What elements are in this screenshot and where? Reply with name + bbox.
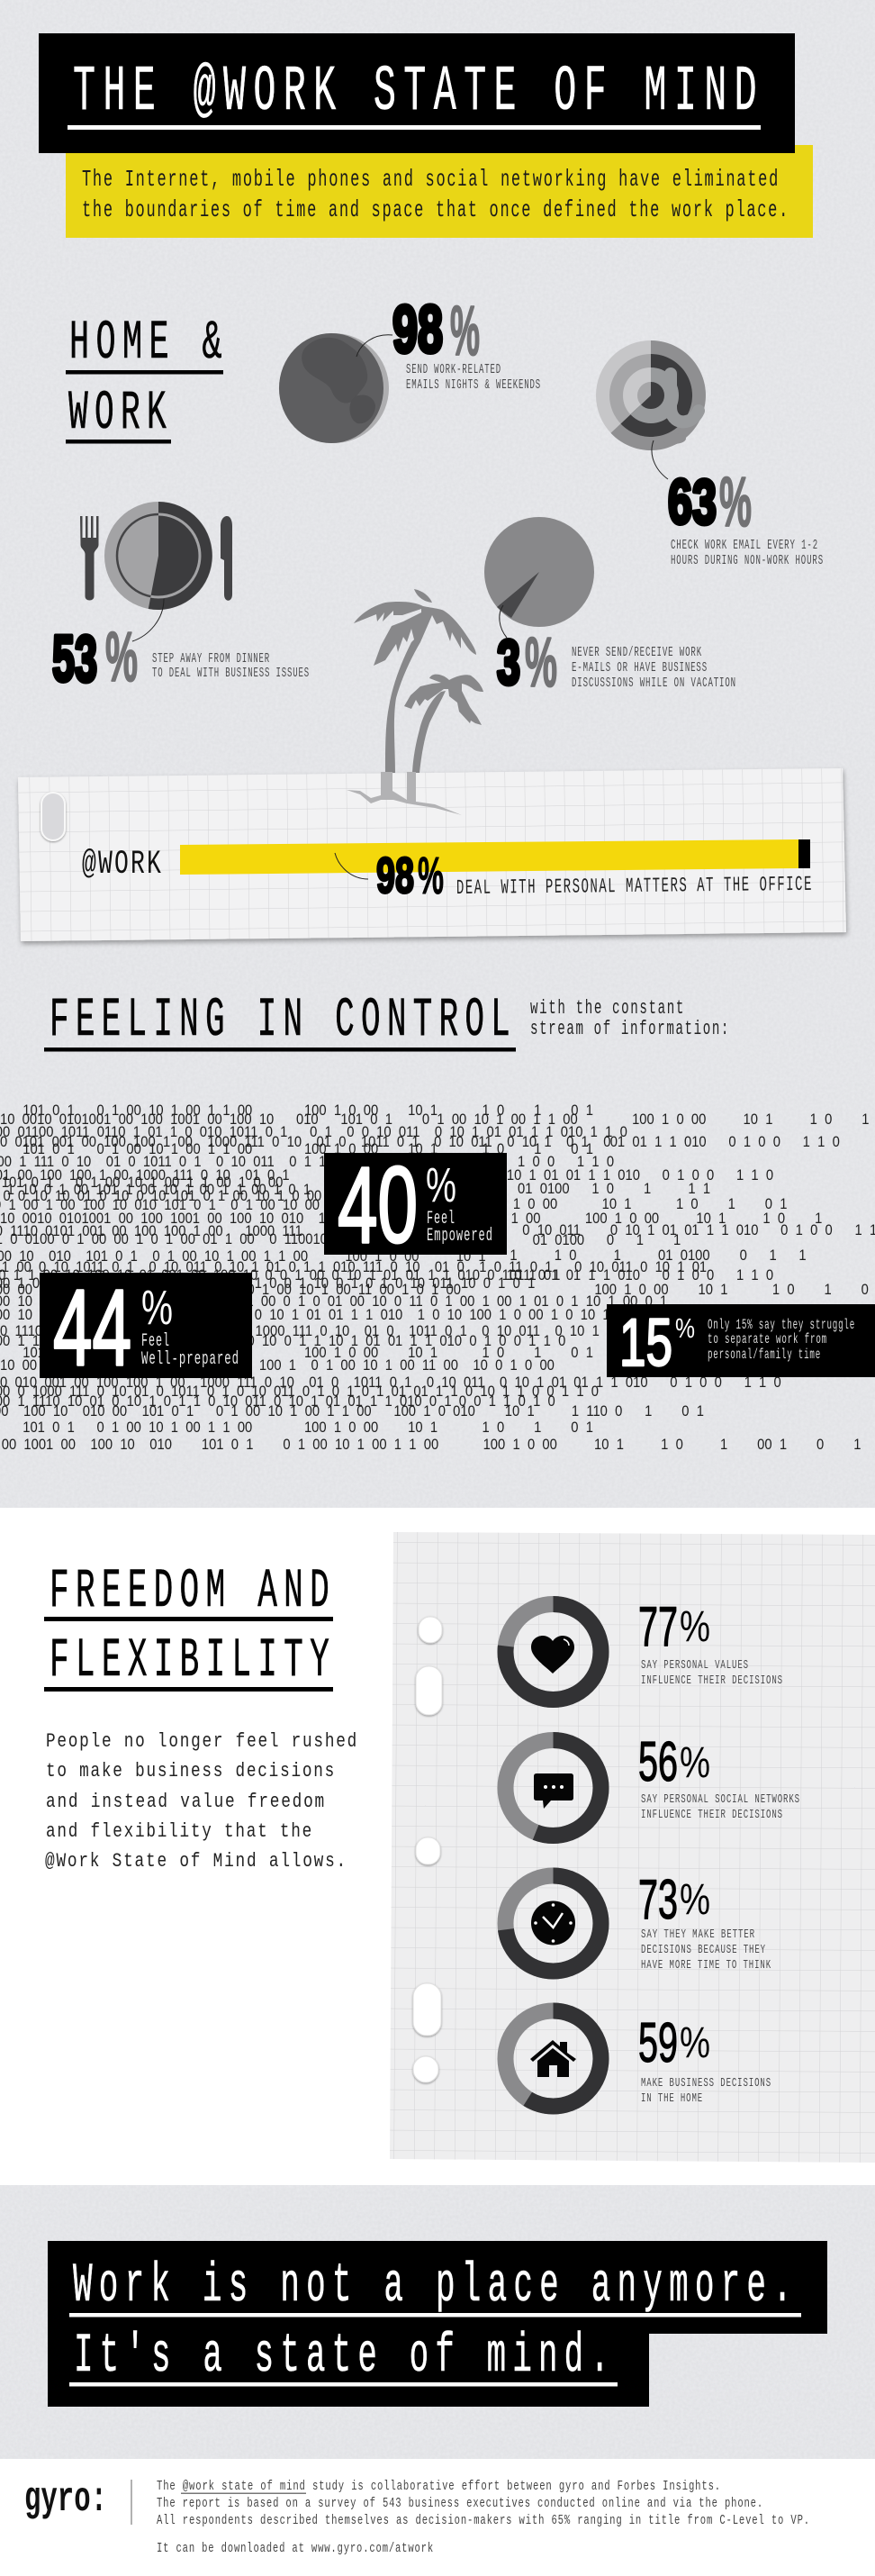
- callout: 15 percent struggle: [607, 1304, 875, 1380]
- leader line: [132, 599, 164, 641]
- intro yellow panel: [66, 145, 813, 238]
- icon: plate: [104, 502, 212, 610]
- footer text: [157, 2479, 810, 2556]
- stat row: 77 percent: [506, 1596, 783, 1700]
- caption: STEP AWAY FROM DINNER: [152, 652, 270, 667]
- value: 98: [392, 292, 443, 367]
- value: %: [680, 1603, 710, 1651]
- value: 73: [638, 1869, 678, 1931]
- binary stream pattern: 00 00 1 0 1 00 10 00 100 0 1 00 1 0 1 00 10 1 00 11 00 1 0 1 00: [0, 1282, 461, 1298]
- callout: 15 percent struggle: %: [675, 1312, 695, 1344]
- background: white middle band: [0, 1508, 875, 2185]
- text block: freedom paragraph: [45, 1730, 358, 1873]
- background: closing textured band: [0, 2185, 875, 2459]
- binary stream pattern: 00 10 010 101 0 1 0 1 00 10 1 00 1 1 00 100 1 0 00 10 1: [0, 1248, 486, 1265]
- punched hole: [41, 793, 65, 840]
- stat row: 73 percent: [506, 1869, 771, 1973]
- binary stream pattern: 1 0 0 1 1 0: [518, 1154, 614, 1170]
- stat: vacation 3 percent: [484, 517, 736, 702]
- title underline: [68, 125, 761, 130]
- leader line: [356, 335, 392, 357]
- heading: freedom and flexibility: FREEDOM AND: [50, 1561, 336, 1623]
- icon: at pie: [596, 340, 706, 450]
- binary stream pattern: 9 1 10 0 1 00 101 1 00 10 1 00 1 1 00 1 0 1: [0, 1182, 311, 1198]
- caption: [671, 539, 824, 568]
- callout: 15 percent struggle: 15: [619, 1305, 672, 1380]
- panel: grid paper: [390, 1532, 875, 2163]
- caption: NEVER SEND/RECEIVE WORK: [572, 646, 702, 660]
- callout: 44 percent feel well-prepared: Well-prepared: [141, 1349, 239, 1370]
- binary stream pattern: 01 01 1 1 010 0 1 0 0 1 1 0: [610, 1134, 840, 1150]
- binary stream pattern: 10 1 01 01 1 1 010 0 1 0 0 1 1 0: [507, 1267, 773, 1283]
- callout: 40 percent feel empowered: %: [426, 1158, 456, 1212]
- stat: moon 98 percent: %: [450, 291, 480, 370]
- binary stream pattern: 0 1110 1 01 0 1000 111 0 10 01 0 1000 111 0 10 01 0 1011 0 1 0 10 011 0 10 1 01: [0, 1323, 622, 1339]
- caption: E-MAILS OR HAVE BUSINESS: [572, 661, 708, 676]
- caption: [641, 1927, 771, 1973]
- caption: HAVE MORE TIME TO THINK: [641, 1958, 771, 1973]
- value: %: [680, 1739, 710, 1787]
- value: %: [418, 847, 444, 905]
- subheading text: stream of information:: [530, 1018, 730, 1040]
- donut: 77 percent with heart: [506, 1604, 601, 1700]
- value: %: [719, 462, 752, 541]
- caption: IN THE HOME: [641, 2091, 703, 2106]
- binary stream pattern: 0 0101 001 00 100 100 1 00 1000 111 0 10 01 0 1011 0 1 0 10 011 0 10 1 0 1 0: [0, 1134, 611, 1150]
- binary stream pattern: 10 0010 0101001 00 100 1001 00 100 10 010 101 0 1 0 1 00 10 1 00 1 1 00: [0, 1111, 578, 1128]
- binary stream pattern: 0 10 011 0 10 1 01 01 1 1 010 0 1 0 0 1 1: [522, 1222, 875, 1238]
- heading: freedom and flexibility: [44, 1561, 336, 1692]
- caption: SAY PERSONAL VALUES: [641, 1658, 749, 1673]
- donut: 56 percent with speech bubble: [506, 1740, 601, 1836]
- binary stream pattern: 0 1110 0101 001 00 100 100 1 00 1000 111: [0, 1223, 302, 1239]
- stat: dinner plate 53 percent: [52, 502, 310, 696]
- callout: 44 percent feel well-prepared: Feel: [141, 1331, 170, 1352]
- icon: fork: [80, 516, 99, 600]
- caption: SAY THEY MAKE BETTER: [641, 1927, 755, 1942]
- logo: gyro: gyro:: [24, 2476, 107, 2523]
- leader line: [335, 853, 368, 879]
- palm roots: [347, 772, 462, 815]
- subheading text: with the constant: [530, 997, 685, 1020]
- leader line: [652, 440, 668, 479]
- callout: 44 percent feel well-prepared: 44: [53, 1267, 131, 1388]
- closing statement block: [48, 2241, 827, 2407]
- binary stream pattern: 101 0 1 0 1 00 10 1 00 1 1 00 1 0 00: [2, 1175, 284, 1191]
- text block: freedom paragraph: People no longer feel rushed: [46, 1730, 358, 1753]
- binary stream pattern: 00 10 01 0 1000 11 0 1 10 1 00 1 01 00 0 1 0 01 00 10 0 11 0 1 00 1 00 1 01 0 1 10 1 00 0 1: [0, 1293, 667, 1310]
- value: 53: [52, 623, 97, 695]
- text block: freedom paragraph: @Work State of Mind allows.: [45, 1850, 347, 1873]
- donut: 59 percent with house: [506, 2010, 601, 2106]
- binary stream pattern: [0, 1102, 875, 1453]
- caption: [572, 646, 736, 691]
- value: 63: [668, 467, 717, 537]
- binary stream pattern: 00 10 1 00 1 00 0 10 0 100 1 0 00 0 10 1 01 01 1 1 010 1 0 10 100 1 0 00 1 0 10 1 01 01: [0, 1307, 654, 1323]
- text block: freedom paragraph: to make business decisions: [46, 1760, 336, 1782]
- intro text: [82, 166, 789, 223]
- binary stream pattern: 00 100 10 010 00 101 0 1 0 1 00 10 1 00 1 1 00 100 1 0 010 10 1 1 110 0 1 0 1: [0, 1403, 704, 1420]
- value: %: [680, 1876, 710, 1924]
- caption: EMAILS NIGHTS & WEEKENDS: [406, 378, 541, 393]
- title block: [39, 33, 795, 153]
- caption: TO DEAL WITH BUSINESS ISSUES: [152, 667, 310, 681]
- caption: [152, 652, 310, 681]
- binary stream pattern: 00 1001 00 100 10 010 101 0 1 0 1 00 10 1 00 1 1 00 100 1 0 00 10 1 1 0 1 00 1 0 1: [2, 1437, 861, 1453]
- binary stream pattern: 101 0 1 0 1 00 10 1 00 1 1 00 100 1 0 00 10 1 1 0 1 0 1: [23, 1420, 593, 1436]
- caption: INFLUENCE THEIR DECISIONS: [641, 1808, 783, 1822]
- binary stream pattern: 00 1 1110 10 01 0 10 1 0 1 1 0 10 011 0 10 1 01 01 1 1 010 0 1 0 0 1 1 0 1 0: [0, 1393, 555, 1410]
- heading: feeling in control: [44, 990, 517, 1052]
- caption: MAKE BUSINESS DECISIONS: [641, 2076, 771, 2091]
- binary stream pattern: 10 1 01 01 1 1 010 0 1 0 0 1 1 0: [507, 1167, 773, 1184]
- binary stream pattern: 00 1 111 0 10 01 0 1011 0 1 0 10 011 0 1 1 0: [0, 1154, 341, 1170]
- caption: INFLUENCE THEIR DECISIONS: [641, 1673, 783, 1688]
- value: %: [105, 617, 138, 696]
- heading: feeling in control: FEELING IN CONTROL: [50, 990, 517, 1052]
- callout: 40 percent feel empowered: 40: [338, 1145, 418, 1265]
- binary stream pattern: 1 0 0100 0 1 00 00 1 0 1 00 01 1 00 0 1100100 0 1: [0, 1231, 365, 1247]
- caption: DECISIONS BECAUSE THEY: [641, 1943, 766, 1957]
- value: 59: [638, 2012, 678, 2074]
- binary stream pattern: 01 00 100 100 1 00 1000 111 0 10 01 0 1: [0, 1167, 290, 1184]
- icon: moon: [279, 333, 389, 443]
- stat: moon 98 percent: [279, 291, 541, 443]
- value: 77: [638, 1596, 678, 1658]
- binary stream pattern: 100 1 0 00 10 1 1 0 1 0: [594, 1282, 869, 1298]
- value: %: [525, 622, 557, 702]
- binary stream pattern: 0 1 1 00 10 100 10 01 001 00 100 10 0 0 1 00 0 10 1 01 01 1 1 010 0 1011 0 1: [0, 1267, 561, 1283]
- donut: 73 percent with clock: [506, 1875, 601, 1971]
- caption: [641, 2076, 771, 2106]
- callout: 44 percent feel well-prepared: %: [141, 1281, 173, 1335]
- stat row: 59 percent: [506, 2010, 771, 2106]
- text block: freedom paragraph: and flexibility that the: [46, 1820, 313, 1843]
- footer divider: [131, 2480, 132, 2525]
- binary stream pattern: 00 01100 1011 0110 1 01 1 0 010 1011 0 1 0 1 0 0 10 011 0 10 1 01 01 1 1 010 1 1 0: [0, 1124, 627, 1140]
- callout: 44 percent feel well-prepared: [40, 1267, 252, 1388]
- icon: palm trees: [354, 589, 483, 773]
- background: top textured paper: [0, 0, 875, 1508]
- binary stream pattern: 101 0 1 0 1 00 10 1 00 1 1 00 100 1 0 00 10 1 1 0 1 0 1: [23, 1102, 593, 1119]
- icon: pie: [484, 517, 594, 627]
- label: @work: @WORK: [82, 846, 163, 884]
- footer text: It can be downloaded at www.gyro.com/atwork: [157, 2541, 434, 2556]
- stat row: 56 percent: [506, 1731, 800, 1836]
- binary stream pattern: 0 010 001 00 100 100 1 00 1000 111 0 10 01 0 1011 0 1 0 10 011 0 10 1 01 01 1 1 010 0 1 0 0 1 1 0: [0, 1374, 781, 1391]
- callout: 40 percent feel empowered: [324, 1145, 507, 1265]
- value: %: [680, 2019, 710, 2067]
- stat: at sign 63 percent: [596, 340, 824, 568]
- binary stream pattern: 0 0 10 10 01 0 10 0 10 101 0 1 00 10 1 0 00: [3, 1188, 321, 1204]
- binary stream pattern: 101 0 1 0 1 00 10 1 00 1 1 00 100 1 0 00 10 1 1 0 1 0 1: [23, 1345, 593, 1361]
- binary stream pattern: 01 0100 0 1 1: [533, 1232, 681, 1248]
- caption: [641, 1792, 800, 1822]
- caption: [641, 1658, 783, 1688]
- binary stream pattern: 10 0010 0101001 00 100 1001 00 100 10 010 101 0 1 0 1 00 10 1 00 1 1 00 100 1 0 00 10 1 1 0 1: [0, 1211, 822, 1227]
- icon: knife: [221, 516, 232, 601]
- value: 98: [376, 847, 414, 903]
- binary stream pattern: 00 0 1000 111 0 10 01 0 1011 0 1 0 10 011 0 1 0 1 0 1 01 01 1 1 0 10 1 1 0 0 1 1 0: [0, 1383, 599, 1400]
- binary stream pattern: 1 1 0 1 01 0100 0 1 1: [510, 1247, 807, 1264]
- binary stream pattern: 1 0 00 10 1 1 0 1 0 1: [513, 1196, 788, 1212]
- binary stream pattern: 00 1 00 10 1 0 00 1 01 0 10 00 0 1 1 0 0 1 10 0 1 0 1 0 10 011 10 0 1 0 1: [0, 1275, 535, 1292]
- binary stream pattern: 0 1 00 1 00 100 10 010 101 0 1 0 1 00 10 00: [0, 1197, 320, 1213]
- leader line: [500, 605, 507, 638]
- binary stream pattern: 10 00 1 00 1 00 100 10 010 00 1 00 100 1 0 1 00 10 1 00 11 00 10 0 1 0 00: [0, 1357, 555, 1374]
- value: [497, 622, 557, 702]
- value: 3: [497, 627, 520, 697]
- binder holes: [413, 1617, 442, 2082]
- binary stream pattern: 11 00 0 10 1011 0 1 0 10 011 0 10 1 01 0 1 1 010 111 0 10 01 0 1 0 11 0 1 0 10 011 0 10 1 01: [0, 1259, 707, 1275]
- heading: home and work: HOME &: [69, 313, 229, 375]
- heading: home and work: [66, 313, 229, 445]
- binary stream pattern: 101 0 1 0 1 00 10 1 00 1 1 00 100 1 0 00 10 1 1 0 1 0 1: [23, 1141, 593, 1157]
- caption: [406, 363, 541, 393]
- callout: 40 percent feel empowered: Feel: [427, 1209, 456, 1229]
- text block: freedom paragraph: and instead value freedom: [46, 1791, 326, 1813]
- subheading text: [530, 997, 730, 1040]
- binary stream pattern: 01 0100 1 0 1 1 1: [518, 1181, 710, 1197]
- heading: home and work: WORK: [68, 383, 173, 445]
- panel: @work paper strip: [18, 768, 846, 941]
- binary stream pattern: 100 1 0 00 10 1 1 0 1: [632, 1111, 870, 1128]
- bar: 98 percent: [180, 839, 810, 875]
- caption: DISCUSSIONS WHILE ON VACATION: [572, 676, 736, 691]
- caption: SEND WORK-RELATED: [406, 363, 501, 377]
- callout: 40 percent feel empowered: Empowered: [427, 1226, 493, 1247]
- binary stream pattern: 00 1 1 00 10 01 001 0 10 1 01 0 1 0 10 0 1 1 10 1 01 01 1 1 010 0 1 0 0 1 1 0: [0, 1333, 565, 1349]
- heading: freedom and flexibility: FLEXIBILITY: [50, 1630, 336, 1692]
- value: 56: [638, 1731, 678, 1793]
